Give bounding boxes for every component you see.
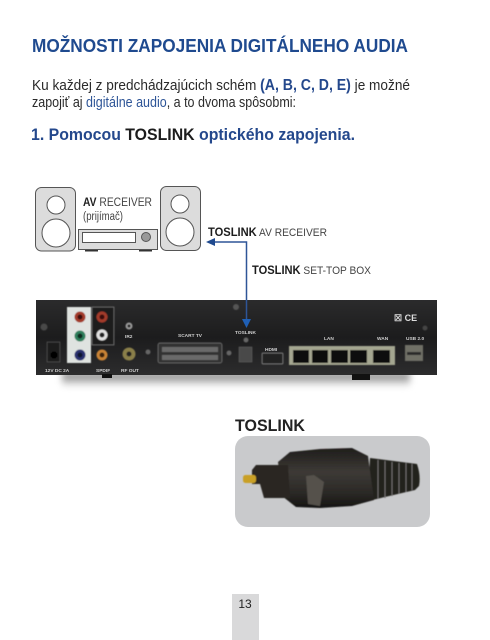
port labels: SCART TV [178, 333, 203, 339]
optical port [239, 347, 252, 362]
port labels: RF OUT [121, 368, 139, 374]
photo: TOSLINK plug [235, 436, 430, 527]
subheading: 1. Pomocou TOSLINK optického zapojenia. [31, 126, 355, 144]
port labels: TOSLINK [235, 330, 257, 336]
port labels: LAN [324, 336, 334, 342]
port labels: 12V DC 2A [45, 368, 70, 374]
icon: left speaker [36, 188, 76, 251]
HDMI port [262, 353, 283, 364]
box body [36, 300, 437, 375]
intro text: Ku každej z predchádzajúcich schém (A, B, C, D, E) je možné [32, 77, 410, 94]
SCART connector [158, 343, 222, 363]
LAN ports [289, 346, 395, 365]
page number tab [232, 594, 259, 640]
heading: TOSLINK: TOSLINK [235, 417, 305, 435]
USB port [405, 345, 423, 361]
label: TOSLINK set-top box: TOSLINK SET-TOP BOX [252, 263, 372, 277]
port labels: USB 2.0 [406, 336, 424, 342]
set-top box rear panel [36, 300, 437, 387]
CE mark: ☒ CE [394, 313, 417, 323]
AV connectors [40, 304, 428, 365]
port labels: IR2 [125, 334, 133, 340]
icon: AV receiver [78, 230, 158, 252]
AV receiver label: AV RECEIVER [83, 197, 152, 209]
plug gold pin [243, 475, 256, 483]
box shadow [62, 373, 410, 387]
intro text: zapojiť aj digitálne audio, a to dvoma spôsobmi: [32, 94, 296, 111]
AV receiver label [83, 197, 152, 223]
port labels: SPDIF [96, 368, 110, 374]
port labels: WAN [377, 336, 389, 342]
AV receiver label: (prijímač) [83, 211, 123, 223]
title: MOŽNOSTI ZAPOJENIA DIGITÁLNEHO AUDIA [32, 35, 408, 56]
port labels: HDMI [265, 347, 278, 353]
intro text [32, 77, 410, 111]
plug tip [252, 465, 290, 498]
arrow: TOSLINK connection [206, 238, 251, 328]
port labels [45, 330, 424, 374]
icon: right speaker [160, 186, 200, 250]
label: TOSLINK AV receiver: TOSLINK AV RECEIVER [208, 225, 327, 239]
page number tab: 13 [238, 597, 252, 611]
plug cable boot [368, 458, 420, 501]
plug body [278, 448, 374, 508]
